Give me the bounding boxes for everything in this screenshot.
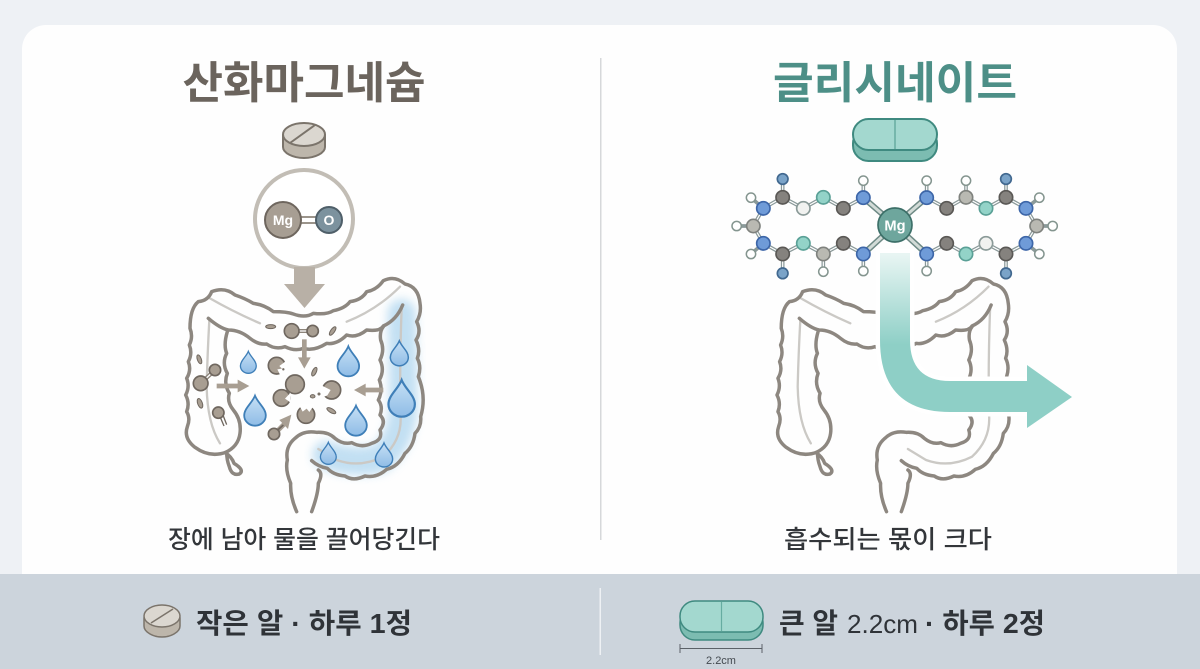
text: small tablet once a day: 작은 알 · 하루 1정 bbox=[196, 608, 412, 639]
arrow: into intestine bbox=[284, 267, 325, 308]
footer: small tablet dose bbox=[144, 605, 412, 639]
arrow: absorbed into body bbox=[880, 253, 1072, 428]
icon: Mg-O molecule in magnifier bbox=[255, 170, 353, 268]
caption: high absorption: 흡수되는 몫이 크다 bbox=[784, 526, 992, 554]
heading: glycinate: 글리시네이트 bbox=[773, 59, 1017, 108]
molecule: magnesium glycinate bbox=[732, 174, 1057, 279]
icon: large tablet bbox=[680, 601, 763, 640]
particle arrows bbox=[217, 339, 383, 430]
panel: glycinate bbox=[732, 59, 1072, 554]
molecule: magnesium glycinate: Mg bbox=[884, 219, 906, 235]
magnesium oxide particles bbox=[193, 324, 341, 440]
heading: magnesium oxide: 산화마그네슘 bbox=[182, 59, 426, 108]
icon: small tablet bbox=[144, 605, 180, 637]
text: large tablet twice a day: 큰 알 bbox=[779, 608, 838, 639]
diagram: intestine bbox=[777, 278, 1011, 512]
water glow bbox=[327, 313, 403, 461]
dimension: 2.2cm bbox=[680, 644, 762, 667]
text: large tablet twice a day: · 하루 2정 bbox=[925, 608, 1045, 639]
bottom band bbox=[0, 574, 1200, 669]
text: large tablet twice a day: 2.2cm bbox=[847, 609, 918, 639]
icon: round tablet bbox=[283, 123, 325, 158]
dimension: 2.2cm: 2.2cm bbox=[706, 655, 736, 667]
icon: oblong tablet bbox=[853, 119, 937, 161]
diagram: intestine with water bbox=[186, 278, 423, 512]
icon: Mg-O molecule in magnifier: O bbox=[324, 212, 335, 228]
water drops bbox=[240, 341, 415, 467]
caption: stays in intestine: 장에 남아 물을 끌어당긴다 bbox=[168, 526, 440, 554]
text: large tablet twice a day bbox=[779, 608, 1045, 639]
panel: magnesium oxide bbox=[168, 59, 440, 554]
icon: Mg-O molecule in magnifier: Mg bbox=[273, 212, 293, 228]
footer: large tablet dose bbox=[680, 601, 1045, 667]
